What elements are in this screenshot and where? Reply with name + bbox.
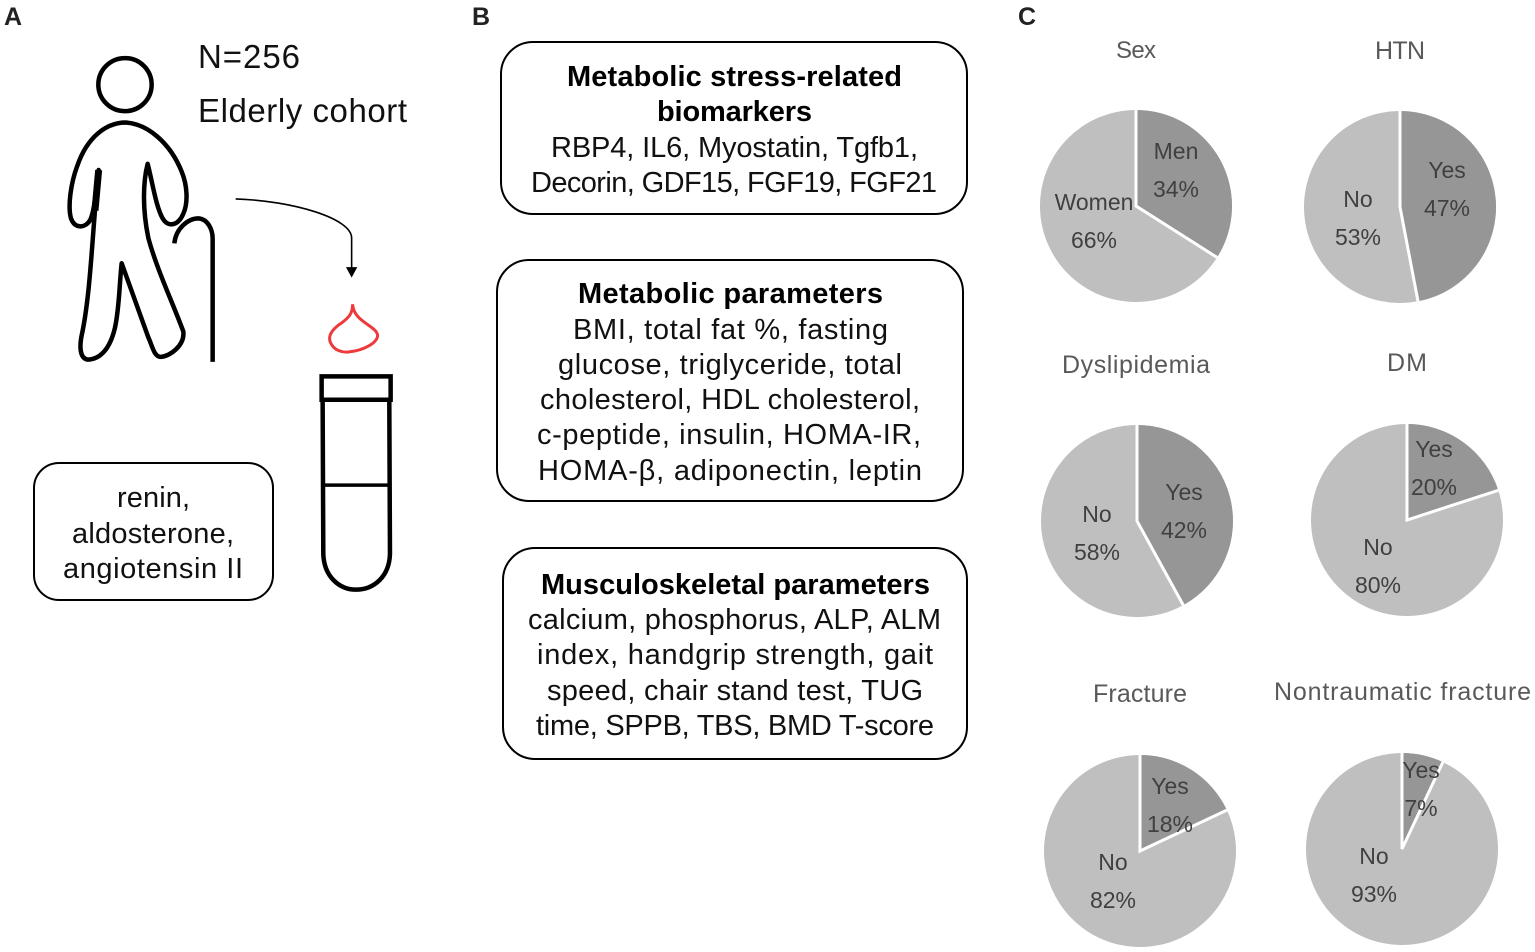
pie chart: DM: 20% [1411, 474, 1457, 500]
pie chart: Dyslipidemia [1041, 351, 1233, 617]
box: metabolic parameters: BMI, total fat %, fasting [573, 314, 888, 346]
cohort size text: N=256 [198, 38, 300, 75]
arrow: person to blood sample [236, 199, 357, 278]
pie chart: Dyslipidemia: Yes [1165, 479, 1203, 505]
pie chart: HTN: 47% [1424, 195, 1470, 221]
box: metabolic stress-related biomarkers: Decorin, GDF15, FGF19, FGF21 [531, 167, 937, 199]
icon: elderly person with cane [70, 58, 213, 362]
panel label A: A [4, 3, 22, 31]
box: metabolic parameters: cholesterol, HDL cholesterol, [540, 384, 920, 416]
box: metabolic stress-related biomarkers: Metabolic stress-related [567, 61, 902, 93]
pie chart: Fracture: Yes [1151, 773, 1189, 799]
pie chart: Sex: Women [1055, 189, 1133, 215]
pie chart: DM: 80% [1355, 572, 1401, 598]
pie chart: DM: DM [1387, 349, 1427, 377]
box: musculoskeletal parameters: calcium, phosphorus, ALP, ALM [528, 604, 941, 636]
panel label C: C [1018, 3, 1036, 31]
pie chart: Fracture: 18% [1147, 811, 1193, 837]
pie chart: HTN: 53% [1335, 224, 1381, 250]
cohort description text: Elderly cohort [198, 92, 407, 129]
pie chart: Nontraumatic fracture: Yes [1402, 757, 1440, 783]
pie chart: Dyslipidemia: No [1082, 501, 1112, 527]
box: RAAS hormones: angiotensin II [63, 553, 243, 585]
box: metabolic parameters: glucose, triglyceride, total [558, 349, 902, 381]
icon: test tube [322, 376, 391, 590]
panel label B: B [472, 3, 490, 31]
pie chart: DM: Yes [1415, 436, 1453, 462]
pie chart: Fracture [1044, 680, 1236, 947]
pie chart: Nontraumatic fracture: Nontraumatic fracture [1274, 678, 1531, 706]
pie chart: Sex: 66% [1071, 227, 1117, 253]
pie chart: HTN: Yes [1428, 157, 1466, 183]
box: musculoskeletal parameters: speed, chair stand test, TUG [547, 675, 923, 707]
pie chart: Dyslipidemia: Dyslipidemia [1062, 351, 1210, 379]
panel B: parameter boxes [472, 3, 967, 759]
pie chart: Nontraumatic fracture: 93% [1351, 881, 1397, 907]
box: metabolic parameters: HOMA-β, adiponectin, leptin [538, 455, 922, 487]
box: musculoskeletal parameters: index, handgrip strength, gait [537, 639, 933, 671]
pie chart: Nontraumatic fracture: No [1359, 843, 1389, 869]
pie chart: DM: No [1363, 534, 1393, 560]
panel A: elderly cohort [4, 3, 407, 600]
pie chart: Sex: Men [1154, 138, 1198, 164]
box: metabolic parameters: c-peptide, insulin, HOMA-IR, [537, 419, 921, 451]
box: musculoskeletal parameters: Musculoskeletal parameters [541, 569, 930, 601]
pie chart: Dyslipidemia: 42% [1161, 517, 1207, 543]
pie chart: Sex [1040, 37, 1232, 302]
pie chart: Nontraumatic fracture [1274, 678, 1531, 945]
pie chart: Sex: Sex [1116, 37, 1156, 64]
box: RAAS hormones: aldosterone, [72, 518, 234, 550]
panel C: cohort pie charts [1018, 3, 1531, 947]
box: RAAS hormones: renin, [117, 482, 190, 514]
box: metabolic stress-related biomarkers: biomarkers [657, 96, 812, 128]
pie chart: HTN: No [1343, 186, 1373, 212]
box: metabolic stress-related biomarkers: RBP4, IL6, Myostatin, Tgfb1, [551, 132, 918, 164]
box: musculoskeletal parameters [503, 548, 967, 759]
pie chart: HTN: HTN [1375, 37, 1425, 65]
pie chart: Dyslipidemia: 58% [1074, 539, 1120, 565]
pie chart: HTN [1304, 37, 1496, 303]
box: musculoskeletal parameters: time, SPPB, TBS, BMD T-score [536, 710, 934, 742]
pie chart: DM [1311, 349, 1503, 616]
pie chart: Nontraumatic fracture: 7% [1404, 795, 1438, 821]
box: metabolic stress-related biomarkers [501, 42, 967, 214]
box: metabolic parameters: Metabolic parameters [578, 278, 883, 310]
box: RAAS hormones [34, 463, 273, 600]
icon: red blood drop [330, 304, 378, 352]
pie chart: Fracture: Fracture [1093, 680, 1187, 708]
pie chart: Fracture: 82% [1090, 887, 1136, 913]
pie chart: Fracture: No [1098, 849, 1128, 875]
box: metabolic parameters [497, 260, 963, 501]
pie chart: Sex: 34% [1153, 176, 1199, 202]
